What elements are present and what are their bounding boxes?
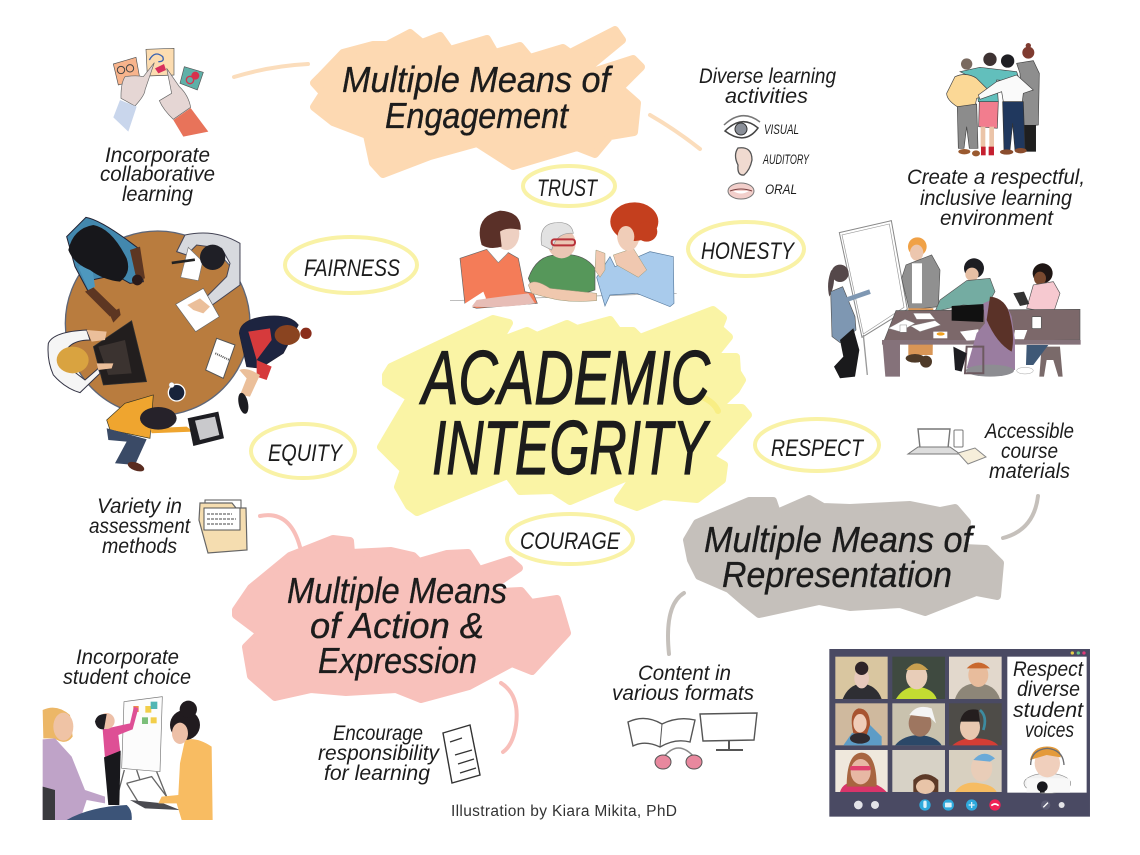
value: TRUST: TRUST	[537, 175, 599, 202]
text: respect diverse student voices	[1013, 658, 1084, 742]
list: visual auditory oral: ORAL	[765, 181, 797, 197]
blob and title: Academic Integrity: INTEGRITY	[432, 406, 711, 491]
student voice panel	[1007, 657, 1087, 793]
value: COURAGE	[507, 514, 633, 564]
illustration: hands on cards	[113, 48, 208, 137]
blob and heading: Multiple Means of Engagement: Multiple Means of	[342, 59, 614, 100]
value: EQUITY: EQUITY	[268, 440, 344, 467]
value: HONESTY	[688, 222, 804, 276]
icon: headphones	[655, 748, 702, 769]
text: incorporate collaborative learning: collaborative	[100, 163, 215, 186]
connector: action to responsibility	[501, 683, 517, 752]
text: respect diverse student voices: diverse	[1017, 678, 1080, 701]
text: encourage responsibility for learning: responsibility	[318, 742, 440, 765]
blob and heading: Multiple Means of Action and Expression: Expression	[318, 640, 477, 681]
text: content in various formats: Content in	[638, 662, 731, 685]
list: visual auditory oral	[762, 121, 810, 197]
text: respect diverse student voices: voices	[1025, 719, 1074, 742]
icon: ear	[736, 148, 752, 175]
whiteboard	[122, 697, 162, 772]
icon: open book	[628, 718, 695, 747]
text: encourage responsibility for learning: Encourage	[333, 722, 423, 745]
blob and title: Academic Integrity	[381, 310, 748, 512]
text: incorporate collaborative learning	[100, 144, 215, 206]
icon: laptop phone and papers	[908, 429, 986, 464]
text: variety in assessment methods: assessment	[89, 515, 191, 538]
text: incorporate student choice: Incorporate	[76, 646, 179, 669]
text: variety in assessment methods: methods	[102, 535, 177, 558]
text: accessible course materials: Accessible	[983, 420, 1074, 443]
round table	[65, 231, 250, 416]
value: HONESTY: HONESTY	[701, 238, 796, 265]
icon: eye	[724, 116, 760, 138]
icon: folder with assessment papers	[199, 500, 247, 553]
blob and heading: Multiple Means of Engagement	[314, 30, 641, 174]
text: variety in assessment methods	[89, 495, 191, 558]
illustration: three people talking	[450, 202, 677, 309]
blob and heading: Multiple Means of Action and Expression: of Action &	[310, 605, 484, 646]
text: incorporate student choice	[63, 646, 191, 689]
text: create a respectful inclusive learning environment	[907, 166, 1085, 230]
text: create a respectful inclusive learning environment: inclusive learning	[920, 187, 1072, 210]
blob and heading: Multiple Means of Representation: Representation	[722, 554, 952, 595]
value: FAIRNESS: FAIRNESS	[304, 255, 400, 282]
text: diverse learning activities: Diverse learning	[699, 65, 836, 88]
connector: representation to content formats	[668, 593, 684, 654]
text: accessible course materials: course	[1001, 440, 1058, 463]
connector: engagement to collaborative learning	[234, 64, 308, 77]
value: RESPECT	[755, 419, 879, 471]
text: content in various formats: various formats	[612, 682, 754, 705]
connector: representation to accessible materials	[1003, 496, 1038, 538]
text: accessible course materials: materials	[989, 460, 1070, 483]
text: diverse learning activities: activities	[725, 85, 809, 108]
text: create a respectful inclusive learning environment: Create a respectful,	[907, 166, 1085, 189]
text: incorporate student choice: student choice	[63, 666, 191, 689]
text: diverse learning activities	[699, 65, 836, 108]
illustration: meeting around table with whiteboard	[828, 221, 1081, 378]
illustration: video call panel	[829, 649, 1090, 817]
list: visual auditory oral: AUDITORY	[762, 151, 810, 167]
value: TRUST	[523, 166, 615, 206]
value: RESPECT: RESPECT	[771, 435, 865, 462]
blob and heading: Multiple Means of Action and Expression	[236, 539, 567, 699]
connector: engagement to learning activities	[650, 115, 700, 149]
window dots	[1071, 651, 1086, 655]
illustration: overhead round table meeting	[48, 217, 312, 473]
text: content in various formats	[612, 662, 754, 705]
value: FAIRNESS	[285, 237, 417, 293]
text: incorporate collaborative learning: learning	[122, 183, 193, 206]
title highlight mark	[702, 397, 718, 411]
blob and heading: Multiple Means of Engagement: Engagement	[385, 95, 570, 136]
credit line: Illustration by Kiara Mikita, PhD	[451, 803, 677, 820]
icon: graded paper	[443, 725, 480, 783]
list: visual auditory oral: VISUAL	[764, 121, 799, 137]
blob and title: Academic Integrity: ACADEMIC	[419, 336, 711, 421]
text: encourage responsibility for learning	[318, 722, 440, 785]
icon: monitor	[700, 713, 757, 750]
value: EQUITY	[251, 424, 355, 478]
call control buttons	[854, 799, 1065, 811]
illustration: student choice at whiteboard	[43, 697, 213, 820]
text: accessible course materials	[983, 420, 1074, 483]
blob and heading: Multiple Means of Representation: Multiple Means of	[704, 519, 976, 560]
text: variety in assessment methods: Variety in	[97, 495, 182, 518]
illustration: group of four hugging	[947, 43, 1039, 156]
text: encourage responsibility for learning: for learning	[324, 762, 430, 785]
connector: action to assessment	[260, 515, 300, 547]
value: COURAGE: COURAGE	[520, 528, 621, 555]
video tiles	[835, 657, 1002, 794]
icon: mouth	[728, 183, 754, 199]
text: respect diverse student voices: Respect	[1013, 658, 1084, 681]
text: incorporate collaborative learning: Incorporate	[105, 144, 210, 167]
blob and heading: Multiple Means of Representation	[687, 499, 1000, 614]
text: respect diverse student voices: student	[1013, 699, 1084, 722]
blob and heading: Multiple Means of Action and Expression: Multiple Means	[287, 570, 507, 611]
text: create a respectful inclusive learning environment: environment	[940, 207, 1054, 230]
